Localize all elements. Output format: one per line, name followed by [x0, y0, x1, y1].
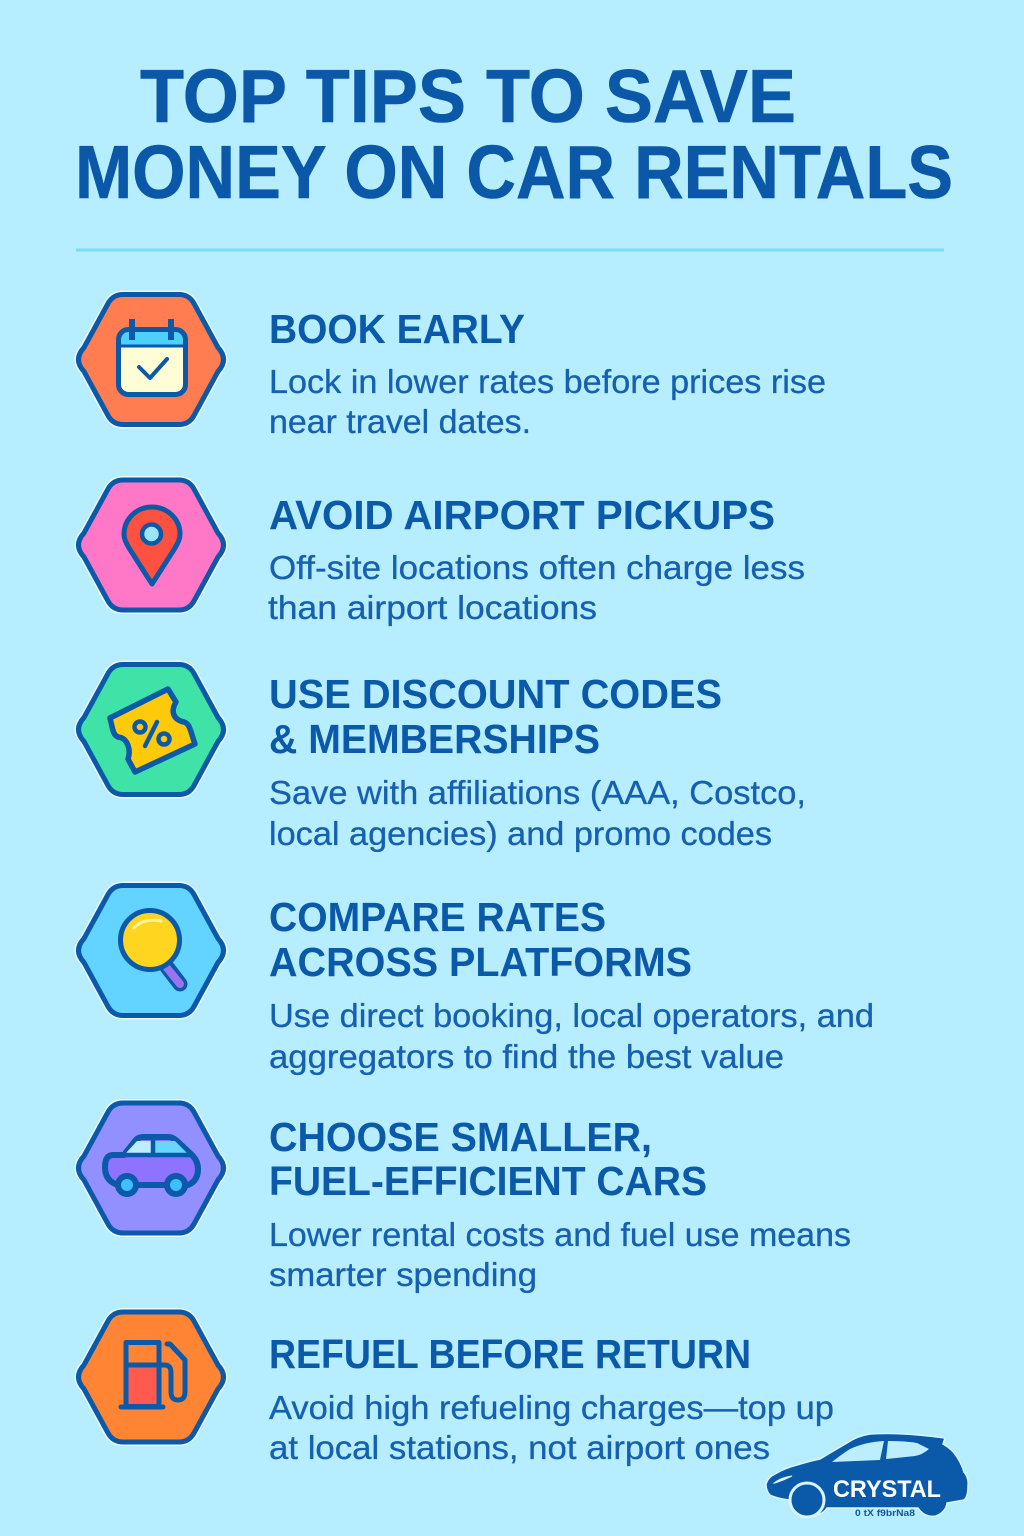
- title: [75, 54, 953, 214]
- description: [269, 774, 806, 852]
- tip 6: refuel: [78, 1312, 834, 1466]
- heading: [269, 1114, 707, 1204]
- description: [269, 1216, 851, 1293]
- title: TOP TIPS TO SAVE: [140, 54, 796, 138]
- heading: REFUEL BEFORE RETURN: [269, 1331, 751, 1377]
- icon: calendar: [78, 294, 224, 424]
- icon: car: [78, 1103, 224, 1233]
- description: [269, 363, 826, 440]
- heading: [269, 671, 722, 762]
- description: than airport locations: [268, 589, 597, 626]
- logo wordmark: CRYSTAL: [833, 1476, 941, 1503]
- description: smarter spending: [269, 1256, 537, 1293]
- description: [269, 997, 874, 1075]
- heading: AVOID AIRPORT PICKUPS: [269, 492, 775, 538]
- heading: ACROSS PLATFORMS: [269, 939, 692, 985]
- icon: discount ticket: [78, 664, 224, 794]
- description: near travel dates.: [269, 403, 531, 440]
- heading: & MEMBERSHIPS: [269, 716, 600, 762]
- description: [268, 549, 805, 626]
- logo tagline: 0 tX f9brNa8: [855, 1508, 915, 1518]
- description: Avoid high refueling charges—top up: [269, 1389, 834, 1426]
- tip 2: avoid airport pickups: [78, 480, 805, 626]
- heading: COMPARE RATES: [269, 894, 606, 940]
- description: Save with affiliations (AAA, Costco,: [269, 774, 806, 811]
- tip 3: discount codes: [78, 664, 806, 852]
- description: [269, 1389, 834, 1466]
- description: Off-site locations often charge less: [269, 549, 805, 586]
- heading: FUEL-EFFICIENT CARS: [269, 1158, 707, 1204]
- description: Lock in lower rates before prices rise: [269, 363, 826, 400]
- description: Lower rental costs and fuel use means: [269, 1216, 851, 1253]
- description: local agencies) and promo codes: [269, 815, 772, 852]
- heading: [269, 894, 692, 985]
- logo: Crystal car: [766, 1434, 968, 1518]
- icon: magnifying glass: [78, 886, 224, 1016]
- description: Use direct booking, local operators, and: [269, 997, 874, 1034]
- heading: CHOOSE SMALLER,: [269, 1114, 652, 1160]
- icon: fuel pump: [78, 1312, 224, 1442]
- description: aggregators to find the best value: [269, 1038, 784, 1075]
- icon: map pin: [78, 480, 224, 610]
- description: at local stations, not airport ones: [269, 1429, 770, 1466]
- tip 5: smaller cars: [78, 1103, 851, 1293]
- heading: USE DISCOUNT CODES: [269, 671, 722, 717]
- title: MONEY ON CAR RENTALS: [75, 130, 953, 214]
- tip 1: book early: [78, 294, 826, 440]
- heading: BOOK EARLY: [269, 306, 525, 352]
- tip 4: compare rates: [78, 886, 874, 1075]
